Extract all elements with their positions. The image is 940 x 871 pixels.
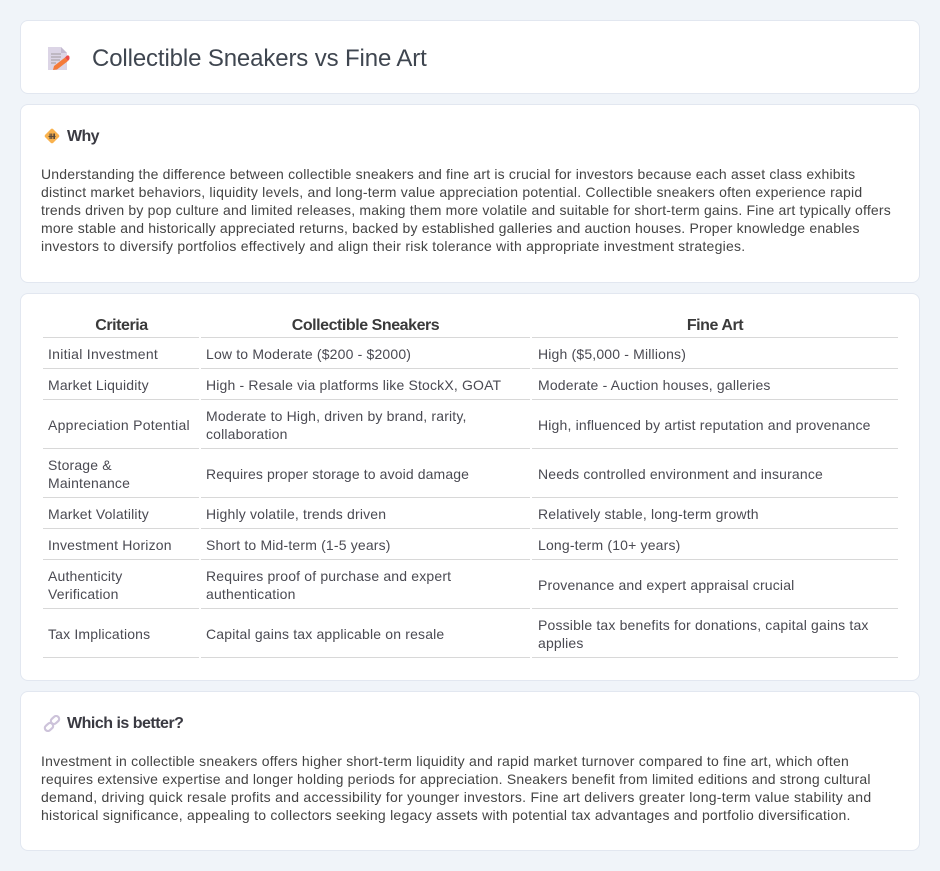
table: comparison: Moderate - Auction houses, galleries bbox=[538, 377, 771, 393]
panel: why bbox=[20, 104, 920, 283]
table: comparison: Tax Implications bbox=[48, 626, 150, 642]
table: comparison: Appreciation Potential bbox=[48, 417, 190, 433]
table: comparison: Relatively stable, long-term growth bbox=[538, 506, 759, 522]
panel: title card bbox=[20, 20, 920, 94]
table: comparison: authentication bbox=[206, 586, 296, 602]
icon: warning diamond bbox=[44, 128, 60, 144]
table: comparison: Market Liquidity bbox=[48, 377, 149, 393]
table: comparison: Market Volatility bbox=[48, 506, 149, 522]
text block: which is better paragraph bbox=[41, 753, 871, 823]
text block: which is better paragraph: demand, driving quick resale profits and accessibility for younger investors. Fine art delivers greater long-term value stability and bbox=[41, 789, 871, 805]
table: comparison: Investment Horizon bbox=[48, 537, 172, 553]
table: comparison: Requires proof of purchase and expert bbox=[206, 568, 451, 584]
icon: chain link bbox=[44, 715, 60, 732]
table: comparison: Collectible Sneakers bbox=[292, 317, 439, 334]
heading: which is better: Which is better? bbox=[67, 715, 183, 732]
icon: document with pencil bbox=[48, 47, 70, 70]
table: comparison: Needs controlled environment and insurance bbox=[538, 466, 823, 482]
text block: which is better paragraph: requires extensive expertise and longer holding periods for appreciation. Sneakers benefit from limited editions and strong cultural bbox=[41, 771, 871, 787]
table: comparison: High ($5,000 - Millions) bbox=[538, 346, 686, 362]
text block: why paragraph bbox=[41, 166, 891, 254]
table: comparison: Highly volatile, trends driven bbox=[206, 506, 386, 522]
table: comparison: Fine Art bbox=[687, 317, 743, 334]
table: comparison: Verification bbox=[48, 586, 119, 602]
table: comparison: Moderate to High, driven by brand, rarity, bbox=[206, 408, 467, 424]
text block: why paragraph: Understanding the difference between collectible sneakers and fine art is crucial for investors because each asset class exhibits bbox=[41, 166, 855, 182]
table: comparison: Low to Moderate ($200 - $2000) bbox=[206, 346, 411, 362]
table: comparison: High - Resale via platforms like StockX, GOAT bbox=[206, 377, 501, 393]
text block: why paragraph: more stable and historically appreciated returns, backed by established galleries and auction houses. Proper knowledge enables bbox=[41, 220, 860, 236]
table: comparison: applies bbox=[538, 635, 584, 651]
table: comparison: Initial Investment bbox=[48, 346, 158, 362]
table: comparison: Criteria bbox=[95, 317, 148, 334]
text block: why paragraph: trends driven by pop culture and limited releases, making them more volatile and suitable for short-term gains. Fine art typically offers bbox=[41, 202, 891, 218]
table: comparison: High, influenced by artist reputation and provenance bbox=[538, 417, 871, 433]
text block: which is better paragraph: Investment in collectible sneakers offers higher short-term liquidity and rapid market turnover compared to fine art, which often bbox=[41, 753, 849, 769]
text block: why paragraph: distinct market behaviors, liquidity levels, and long-term value appreciation potential. Collectible sneakers often experience rapid bbox=[41, 184, 862, 200]
table: comparison: Capital gains tax applicable on resale bbox=[206, 626, 444, 642]
text block: why paragraph: investors to diversify portfolios effectively and align their risk tolerance with appropriate investment strategies. bbox=[41, 238, 745, 254]
table: comparison: Maintenance bbox=[48, 475, 130, 491]
table: comparison: Requires proper storage to avoid damage bbox=[206, 466, 469, 482]
table: comparison bbox=[43, 317, 898, 658]
title: Collectible Sneakers vs Fine Art bbox=[92, 45, 427, 72]
table: comparison: Long-term (10+ years) bbox=[538, 537, 680, 553]
table: comparison: Authenticity bbox=[48, 568, 122, 584]
panel: comparison table bbox=[20, 293, 920, 681]
panel: which is better bbox=[20, 691, 920, 851]
table: comparison: Provenance and expert appraisal crucial bbox=[538, 577, 794, 593]
table: comparison: Storage & bbox=[48, 457, 112, 473]
table: comparison: Possible tax benefits for donations, capital gains tax bbox=[538, 617, 869, 633]
heading: why: Why bbox=[67, 128, 99, 145]
table: comparison: collaboration bbox=[206, 426, 288, 442]
text block: which is better paragraph: historical significance, appealing to collectors seeking legacy assets with potential tax advantages and portfolio diversification. bbox=[41, 807, 851, 823]
table: comparison: Short to Mid-term (1-5 years) bbox=[206, 537, 391, 553]
